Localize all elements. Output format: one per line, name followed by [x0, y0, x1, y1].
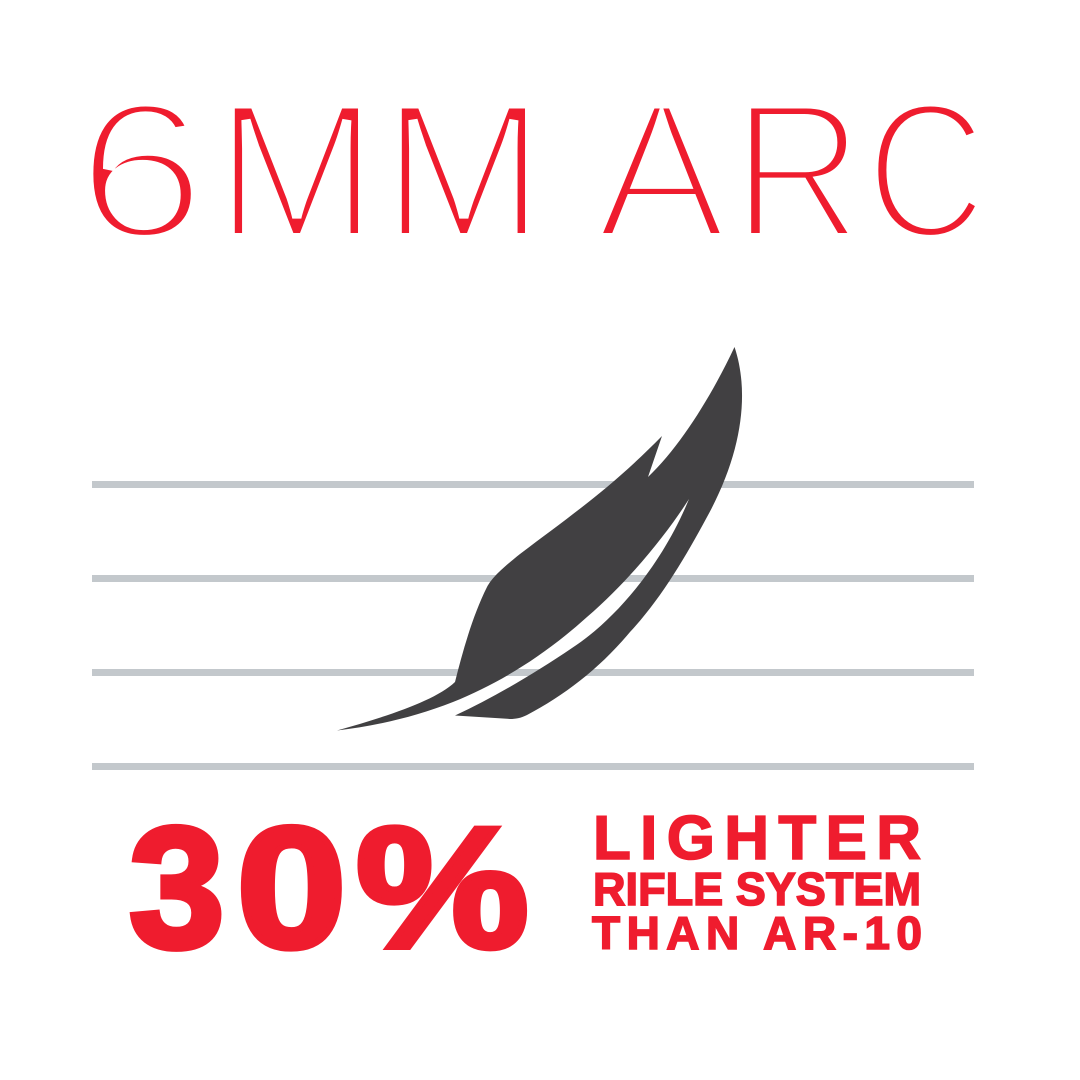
icon: feather: [337, 347, 742, 730]
title: 6MM ARC: [76, 62, 986, 279]
title: 6MM ARC: M: [381, 62, 546, 279]
title: 6MM ARC: M: [214, 62, 379, 279]
title: 6MM ARC: C: [866, 63, 986, 279]
caption: lighter rifle system than AR-10: RIFLE SYSTEM: [593, 863, 921, 915]
caption: lighter rifle system than AR-10: [592, 804, 922, 959]
chart lines: [92, 481, 974, 770]
title: 6MM ARC: 6: [76, 62, 207, 279]
caption: lighter rifle system than AR-10: THAN AR-10: [592, 907, 922, 959]
stat: 30%: [129, 791, 529, 984]
stat: 30%: %: [356, 791, 529, 984]
stat: 30%: 0: [236, 792, 347, 984]
stat: 30%: 3: [129, 792, 225, 984]
title: 6MM ARC: R: [732, 62, 864, 279]
title: 6MM ARC: A: [596, 62, 727, 279]
caption: lighter rifle system than AR-10: LIGHTER: [593, 804, 921, 873]
